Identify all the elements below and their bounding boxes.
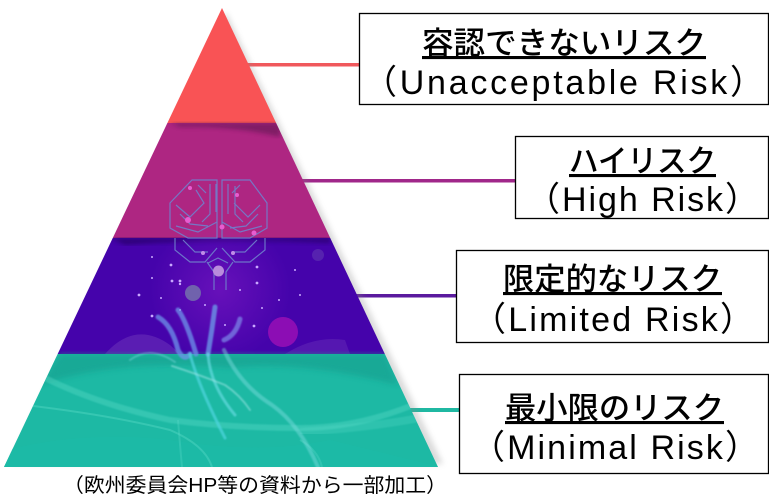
pyramid soft shadow — [10, 12, 443, 464]
risk pyramid — [0, 8, 460, 468]
brain glow nodes — [185, 186, 256, 255]
tier: minimal (teal) — [0, 354, 460, 468]
connector: minimal risk — [410, 408, 460, 412]
label box: limited risk — [456, 250, 768, 342]
subtitle: minimal risk: （Minimal Risk） — [471, 429, 759, 467]
subtitle: limited risk: （Limited Risk） — [472, 301, 754, 339]
connector: high risk — [300, 179, 516, 182]
brain core node — [213, 266, 224, 276]
icon: circuit brain — [170, 180, 267, 290]
tier: high (magenta) — [112, 122, 330, 238]
tier: unacceptable (red) — [167, 8, 276, 123]
label box: high risk — [516, 136, 768, 219]
heading: limited risk: 限定的なリスク — [503, 262, 722, 297]
label box: unacceptable risk — [360, 14, 768, 104]
subtitle: high risk: （High Risk） — [526, 181, 759, 219]
source caption: （欧州委員会HP等の資料から一部加工） — [63, 474, 447, 497]
tier: limited (indigo) — [58, 237, 385, 354]
star particles — [138, 256, 301, 327]
heading: high risk: ハイリスク — [569, 144, 716, 179]
connector: limited risk — [355, 294, 457, 298]
subtitle: unacceptable risk: （Unacceptable Risk） — [363, 64, 764, 102]
connector: unacceptable risk — [245, 63, 360, 66]
heading: unacceptable risk: 容認できないリスク — [422, 26, 706, 61]
icon: translucent hand — [130, 307, 318, 467]
label box: minimal risk — [460, 374, 768, 474]
heading: minimal risk: 最小限のリスク — [505, 391, 724, 426]
